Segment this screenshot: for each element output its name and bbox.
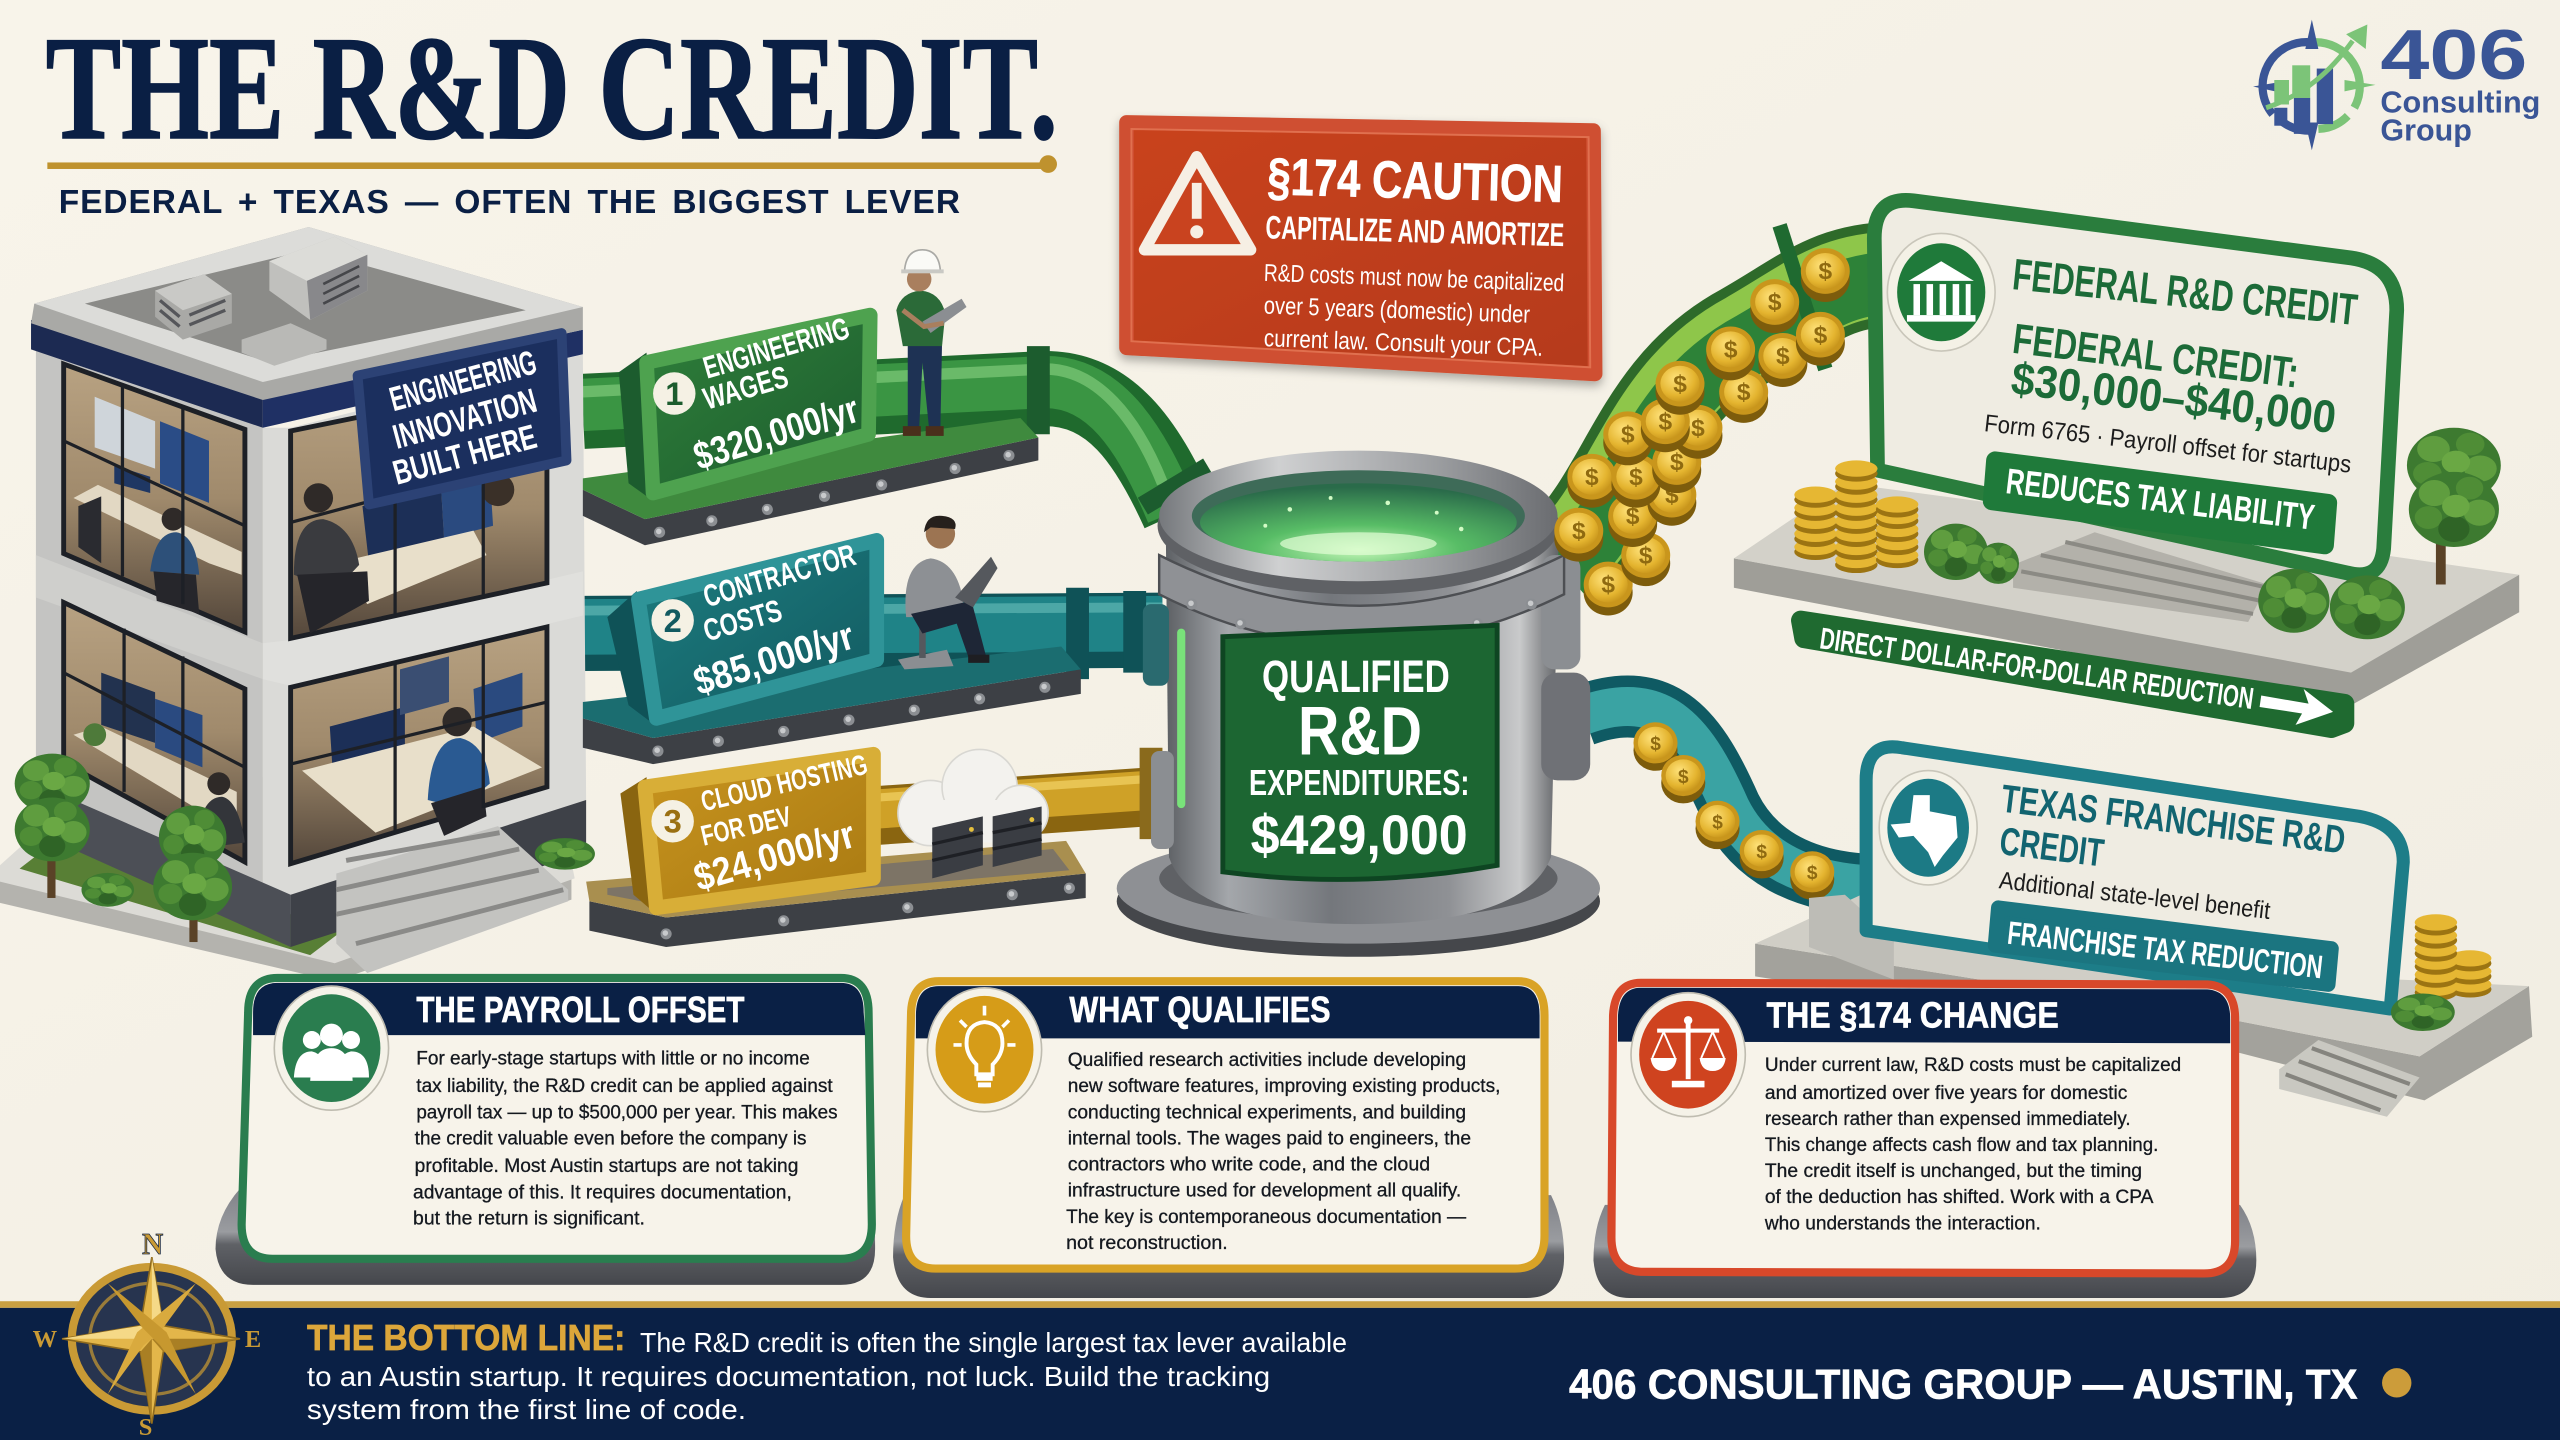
glowing liquid [1192, 470, 1525, 562]
card pedestal [893, 1195, 1564, 1298]
coins in green chute: $ [1621, 421, 1635, 448]
footer band [0, 1301, 2560, 1440]
coins in green chute: $ [1629, 464, 1643, 491]
card text: Under current law, R&D costs must be capitalized [1765, 1055, 2181, 1076]
coins in green chute: $ [1665, 482, 1679, 509]
card text: Qualified research activities include developing [1068, 1050, 1466, 1071]
card text: tax liability, the R&D credit can be applied against [416, 1076, 833, 1097]
Texas sign pedestal [1755, 895, 2532, 1117]
federal sign steps [2013, 532, 2268, 622]
coins in teal chute: $ [1807, 863, 1818, 884]
card text: of the deduction has shifted. Work with a CPA [1765, 1187, 2154, 1208]
card text: For early-stage startups with little or no income [416, 1048, 810, 1069]
card header [916, 986, 1540, 1038]
card text [413, 1048, 838, 1229]
coins in green chute: $ [1673, 371, 1687, 398]
icon: scales medallion [1631, 993, 1745, 1117]
green input pipe [583, 346, 1208, 513]
coins in teal chute: $ [1756, 842, 1767, 863]
card text: internal tools. The wages paid to engineers, the [1068, 1128, 1471, 1149]
green coin chute to federal sign [1559, 225, 1891, 571]
label panel: qualified R&D: $429,000 [1251, 804, 1468, 866]
cost panel 2: contractor costs: 2 [664, 602, 682, 639]
building sign: engineering innovation [358, 333, 567, 504]
coins in teal chute: $ [1712, 813, 1723, 834]
coins in green chute: $ [1626, 503, 1640, 530]
card body [906, 981, 1544, 1269]
federal coin stacks [1794, 460, 1918, 573]
footer brand: 406 CONSULTING GROUP — AUSTIN, TX [1569, 1360, 2358, 1407]
coins in teal chute [1633, 722, 1834, 900]
bottom line text [307, 1317, 1347, 1425]
card text: conducting technical experiments, and building [1068, 1102, 1466, 1123]
rim rivets [1186, 599, 1537, 644]
cost panel 2: contractor costs: $85,000/yr [689, 615, 859, 704]
building [0, 227, 595, 981]
card text: and amortized over five years for domestic [1765, 1083, 2127, 1104]
gold input pipe [865, 748, 1151, 839]
card body [242, 978, 872, 1259]
card text: This change affects cash flow and tax planning. [1765, 1135, 2158, 1156]
Texas sign: TEXAS FRANCHISE R&D [1999, 778, 2348, 863]
coins in green chute: $ [1737, 379, 1751, 406]
label panel: qualified R&D [1223, 625, 1497, 879]
teal coin chute to Texas sign [1584, 706, 1869, 885]
card: the payroll offset: THE PAYROLL OFFSET [416, 989, 745, 1030]
card: the payroll offset [216, 978, 875, 1285]
logo wordmark: 406 [2380, 15, 2527, 94]
logo wordmark [2380, 15, 2540, 147]
Texas sign [1866, 747, 2403, 1009]
icon: bank medallion [1887, 233, 1995, 351]
card text: research rather than expensed immediately. [1765, 1109, 2131, 1130]
green glow strip [1177, 629, 1185, 808]
federal sign pedestal [1734, 483, 2519, 705]
trees [15, 754, 595, 942]
icon: warning triangle [1144, 157, 1251, 250]
coins in green chute: $ [1601, 572, 1615, 599]
label panel: qualified R&D: QUALIFIED [1262, 651, 1450, 702]
federal sign trees and shrubs [1924, 428, 2501, 639]
building sign: engineering innovation: BUILT HERE [389, 418, 541, 493]
icon: lightbulb medallion [927, 988, 1042, 1112]
coins in green chute: $ [1659, 408, 1673, 435]
pedestal steps [1809, 895, 2420, 1117]
section 174 caution sign: CAPITALIZE AND AMORTIZE [1265, 208, 1565, 253]
cost panel 3: cloud hosting: 3 [664, 803, 682, 840]
coins in green chute: $ [1639, 542, 1653, 569]
pill: franchise tax reduction: FRANCHISE TAX REDUCTION [2006, 914, 2325, 985]
gold dot [2382, 1368, 2411, 1398]
card text: The key is contemporaneous documentation — [1066, 1207, 1466, 1228]
cost panel 1: engineering wages: WAGES [699, 359, 792, 417]
section 174 caution sign: §174 CAUTION [1267, 148, 1564, 214]
card: the section 174 change [1593, 983, 2256, 1298]
compass rose: E [245, 1326, 261, 1353]
cost panel 2: contractor costs: COSTS [699, 593, 786, 648]
teal input pipe [580, 588, 1162, 679]
cost panel 3: cloud hosting: CLOUD HOSTING [698, 749, 871, 818]
tank base [1117, 833, 1600, 957]
federal sign [1874, 200, 2397, 575]
bottom line text: system from the first line of code. [307, 1394, 746, 1425]
label panel: qualified R&D: EXPENDITURES: [1249, 762, 1469, 803]
right wall [263, 354, 586, 931]
conveyor platform: gold [586, 841, 1086, 947]
coins in teal chute: $ [1650, 734, 1661, 755]
card text: profitable. Most Austin startups are not taking [415, 1156, 798, 1177]
Texas sign: CREDIT [1997, 820, 2106, 876]
section 174 caution sign [1127, 122, 1595, 374]
coins in teal chute: $ [1678, 767, 1689, 788]
coins in green chute: $ [1819, 258, 1833, 285]
rooftop hvac units [155, 237, 367, 366]
icon: Texas medallion [1879, 771, 1977, 885]
cost panel 3: cloud hosting: $24,000/yr [689, 813, 860, 900]
coins in green chute: $ [1724, 337, 1738, 364]
icon: compass with rising chart [2253, 20, 2376, 150]
card: what qualifies: WHAT QUALIFIES [1069, 989, 1331, 1030]
card: the section 174 change: THE §174 CHANGE [1767, 995, 2059, 1036]
card text [1066, 1050, 1500, 1254]
logo: 406 Consulting Group [2253, 15, 2540, 150]
coins in green chute [1554, 248, 1850, 616]
Texas sign: Additional state-level benefit [1998, 867, 2272, 925]
logo wordmark: Consulting [2380, 87, 2540, 120]
conveyor platform: teal [583, 647, 1081, 764]
lower rim [1159, 555, 1564, 645]
engineer with hard hat [896, 250, 967, 436]
card text: the credit valuable even before the company is [415, 1128, 807, 1149]
arrow [2260, 689, 2333, 725]
top rim [1158, 451, 1559, 594]
cost panel 1: engineering wages: ENGINEERING [699, 310, 853, 386]
card text: who understands the interaction. [1764, 1213, 2041, 1234]
label panel: qualified R&D: R&D [1298, 692, 1422, 769]
card header [1618, 988, 2230, 1043]
card pedestal [216, 1189, 875, 1285]
bottom line text: to an Austin startup. It requires documentation, not luck. Build the tracking [307, 1361, 1270, 1392]
card body [1611, 983, 2235, 1273]
cost panel 2: contractor costs: CONTRACTOR [699, 537, 860, 614]
title: THE R&D CREDIT. [46, 7, 1058, 171]
card text: The credit itself is unchanged, but the timing [1765, 1161, 2142, 1182]
central tank [1117, 451, 1600, 957]
section 174 caution sign: current law. Consult your CPA. [1263, 325, 1543, 362]
federal sign: $30,000–$40,000 [2009, 353, 2339, 443]
coins in green chute: $ [1768, 289, 1782, 316]
cost panel 1: engineering wages: $320,000/yr [689, 388, 864, 479]
pill: reduces tax liability [1992, 460, 2328, 545]
card pedestal [1593, 1205, 2256, 1298]
icon: cloud and servers [898, 749, 1048, 878]
navy roof band [31, 320, 583, 428]
subtitle: FEDERAL + TEXAS — OFTEN THE BIGGEST LEVER [59, 184, 960, 221]
card text: but the return is significant. [413, 1208, 645, 1229]
window: lower left [64, 602, 245, 862]
coins in green chute: $ [1814, 322, 1828, 349]
cost panel 2: contractor costs [607, 537, 877, 725]
coins in green chute: $ [1670, 449, 1684, 476]
icon: people medallion [274, 986, 389, 1110]
window: upper left [64, 364, 245, 632]
cost panel 1: engineering wages [619, 310, 870, 500]
pill: franchise tax reduction [1995, 908, 2331, 985]
entrance steps [336, 826, 568, 973]
bottom line text: The R&D credit is often the single largest tax lever available [640, 1327, 1347, 1358]
cost panel 1: engineering wages: 1 [665, 375, 683, 412]
left wall [36, 349, 263, 931]
window: upper right [291, 379, 547, 638]
federal sign: FEDERAL R&D CREDIT [2010, 250, 2360, 335]
logo wordmark: Group [2380, 114, 2472, 147]
Texas coin stacks and shrubs [2391, 914, 2491, 1031]
arrow pill: direct dollar-for-dollar reduction [1801, 620, 2344, 728]
card header [253, 983, 865, 1035]
arrow pill: direct dollar-for-dollar reduction: DIRECT DOLLAR-FOR-DOLLAR REDUCTION [1818, 622, 2256, 716]
pill: reduces tax liability: REDUCES TAX LIABILITY [2004, 460, 2317, 538]
cost panel 3: cloud hosting: FOR DEV [698, 801, 794, 853]
plinth [36, 784, 586, 947]
right pipe flanges [1541, 555, 1590, 780]
card text [1764, 1055, 2181, 1234]
compass rose: N [142, 1226, 163, 1261]
left pipe flanges [1143, 604, 1174, 849]
compass rose: W [33, 1326, 58, 1353]
federal sign: FEDERAL CREDIT: [2010, 315, 2301, 397]
bottom line text: THE BOTTOM LINE: [307, 1317, 625, 1358]
building sign: engineering innovation: INNOVATION [389, 382, 541, 457]
conveyor platform: green [583, 418, 1038, 545]
card text: payroll tax — up to $500,000 per year. This makes [416, 1102, 838, 1123]
tank body [1166, 519, 1559, 924]
section 174 caution sign: over 5 years (domestic) under [1263, 292, 1530, 329]
ground slab [0, 784, 571, 981]
cost panel 3: cloud hosting [620, 749, 873, 914]
coins in green chute: $ [1572, 518, 1586, 545]
card text: not reconstruction. [1066, 1233, 1228, 1254]
coins in green chute: $ [1691, 415, 1705, 442]
roof [31, 227, 583, 400]
contractor with laptop [898, 516, 998, 669]
window: lower right [291, 627, 547, 864]
coins in green chute: $ [1776, 343, 1790, 370]
floor band [36, 555, 583, 686]
card text: contractors who write code, and the cloud [1068, 1155, 1430, 1176]
coins in green chute: $ [1585, 464, 1599, 491]
title rule [47, 155, 1057, 173]
card text: infrastructure used for development all qualify. [1068, 1181, 1461, 1202]
section 174 caution sign: R&D costs must now be capitalized [1263, 260, 1565, 297]
lawn [20, 808, 351, 955]
card text: advantage of this. It requires documentation, [413, 1182, 792, 1203]
compass rose [33, 1226, 261, 1440]
building sign: engineering innovation: ENGINEERING [386, 344, 541, 419]
federal sign: Form 6765 · Payroll offset for startups [1983, 410, 2353, 479]
card text: new software features, improving existing products, [1068, 1076, 1500, 1097]
card: what qualifies [893, 981, 1564, 1298]
